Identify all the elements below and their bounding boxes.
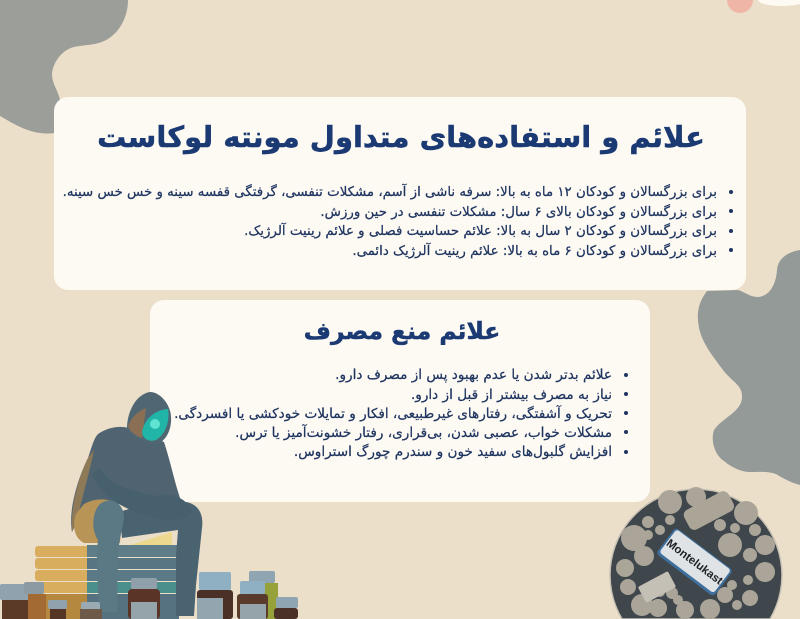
books	[35, 532, 179, 619]
list: contraindications: نیاز به مصرف بیشتر از قبل از دارو.	[411, 387, 612, 403]
pill bottle	[682, 489, 736, 532]
panel: contraindications	[150, 300, 650, 502]
panel: common uses	[54, 97, 746, 290]
heading: common uses: علائم و استفاده‌های متداول مونته لوکاست	[97, 120, 705, 154]
list: common uses: برای بزرگسالان و کودکان ۶ ماه به بالا: علائم رینیت آلرژیک دائمی.	[352, 244, 717, 259]
list: common uses: برای بزرگسالان و کودکان ۱۲ ماه به بالا: سرفه ناشی از آسم، مشکلات تنفسی، گرفتگی قفسه سینه و خس خس سینه.	[63, 185, 717, 200]
list: contraindications: تحریک و آشفتگی، رفتارهای غیرطبیعی، افکار و تمایلات خودکشی یا افسردگی.	[174, 406, 612, 422]
label card	[656, 527, 733, 597]
list: common uses	[63, 183, 717, 259]
list: common uses: برای بزرگسالان و کودکان بالای ۶ سال: مشکلات تنفسی در حین ورزش.	[320, 205, 717, 220]
glowing face	[142, 409, 168, 441]
illustration: seated hooded figure on books with medicine bottles	[0, 392, 298, 619]
bottles	[0, 571, 298, 619]
list: contraindications	[174, 367, 612, 460]
list: contraindications: افزایش گلبول‌های سفید خون و سندرم چورگ استراوس.	[294, 444, 612, 460]
label card: Montelukast	[664, 537, 725, 587]
figure	[71, 392, 202, 616]
illustration: Montelukast pills circle	[609, 487, 783, 619]
near leg	[93, 500, 124, 612]
list: contraindications: مشکلات خواب، عصبی شدن، بی‌قراری، رفتار خشونت‌آمیز یا ترس.	[235, 425, 612, 441]
heading: contraindications: علائم منع مصرف	[304, 317, 500, 345]
hip	[74, 499, 122, 543]
back and arm	[71, 427, 180, 532]
hood	[127, 392, 171, 444]
far leg	[120, 502, 202, 616]
list: contraindications: علائم بدتر شدن یا عدم بهبود پس از مصرف دارو.	[335, 367, 612, 383]
blister pack	[638, 571, 676, 603]
forearm and hands	[92, 468, 192, 520]
list: common uses: برای بزرگسالان و کودکان ۲ سال به بالا: علائم حساسیت فصلی و علائم رینیت آلرژیک.	[244, 224, 717, 239]
